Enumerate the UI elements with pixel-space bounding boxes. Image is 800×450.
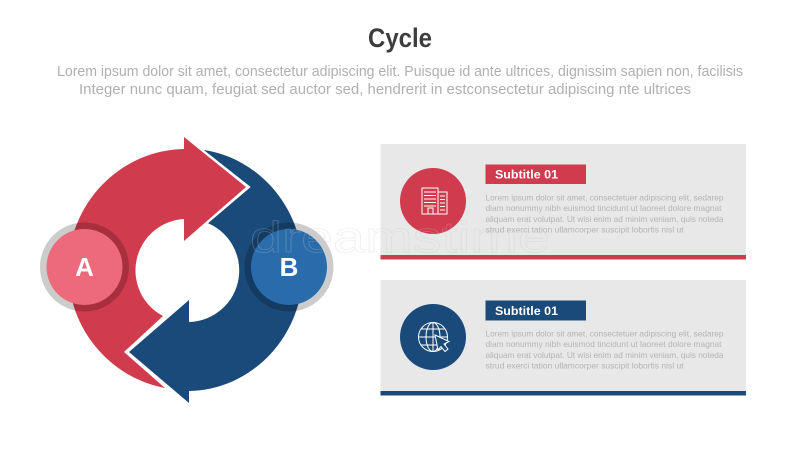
description text: [57, 63, 743, 98]
panel 1 background: [380, 144, 746, 255]
subtitle label 1: [486, 164, 586, 184]
body text 2: Lorem ipsum dolor sit amet, consectetuer adipiscing elit, sedarep: [486, 328, 724, 338]
body text 1: strud exerci tation ullamcorper suscipit lobortis nisl ut: [486, 224, 684, 234]
subtitle label 2: Subtitle 01: [495, 306, 559, 318]
watermark: dreamstime: [250, 213, 550, 262]
node B: B: [280, 252, 298, 282]
blue arrow: [129, 150, 303, 403]
subtitle label 1: Subtitle 01: [495, 170, 559, 182]
panel: item 2: [380, 280, 746, 396]
description text: Integer nunc quam, feugiat sed auctor sed, hendrerit in estconsectetur adipiscing nte ultrices: [79, 81, 691, 98]
description text: Lorem ipsum dolor sit amet, consectetur adipiscing elit. Puisque id ante ultrices, dignissim sapien non, facilisis: [57, 63, 743, 80]
panel 2 background: [380, 280, 746, 391]
cycle diagram: [40, 137, 334, 403]
body text 1: Lorem ipsum dolor sit amet, consectetuer adipiscing elit, sedarep: [486, 192, 724, 202]
title: Cycle: [368, 23, 432, 53]
body text 2: [486, 328, 724, 370]
body text 1: [486, 192, 724, 234]
red arrow: [68, 137, 247, 388]
panel 1 bottom bar: [380, 255, 746, 260]
node A: [40, 222, 129, 312]
icon: building: [400, 168, 466, 234]
node B: [244, 222, 334, 312]
icon: globe with cursor: [400, 304, 466, 370]
body text 2: diam nonummy nibh euismod tincidunt ut laoreet dolore magnat: [486, 339, 722, 349]
subtitle label 2: [486, 300, 586, 320]
body text 2: aliquam erat volutpat. Ut wisi enim ad minim veniam, quis noteda: [486, 350, 724, 360]
body text 2: strud exerci tation ullamcorper suscipit lobortis nisl ut: [486, 360, 684, 370]
body text 1: aliquam erat volutpat. Ut wisi enim ad minim veniam, quis noteda: [486, 214, 724, 224]
panel: item 1: [380, 144, 746, 260]
panel 2 bottom bar: [380, 391, 746, 396]
node A: A: [75, 252, 94, 282]
body text 1: diam nonummy nibh euismod tincidunt ut laoreet dolore magnat: [486, 203, 722, 213]
